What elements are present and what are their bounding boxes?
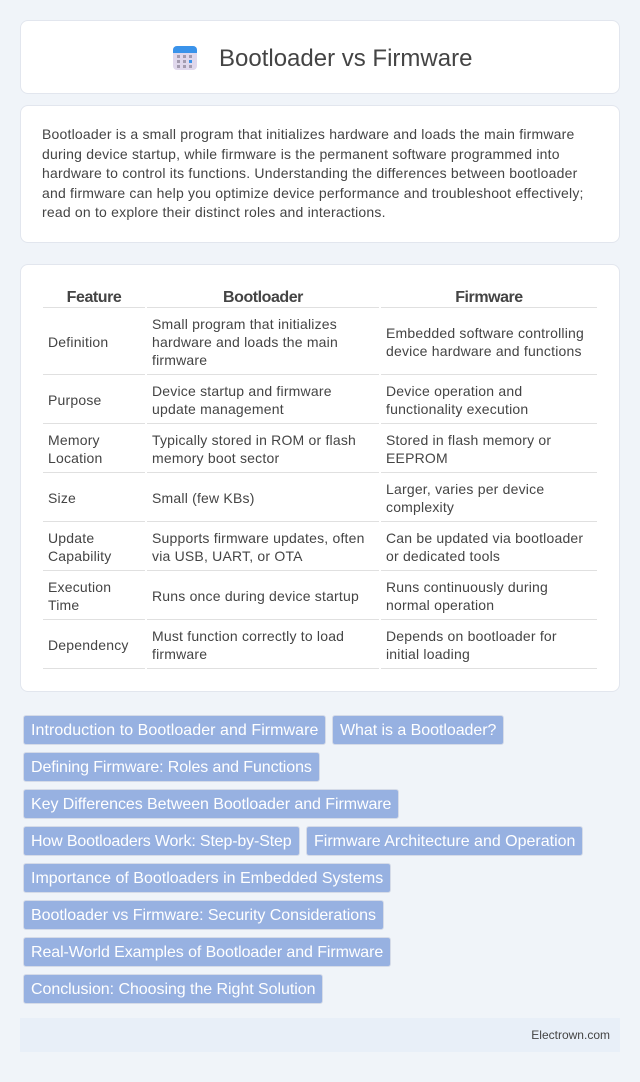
row: Execution Time: Execution <box>48 579 111 595</box>
table header: Bootloader <box>223 289 303 306</box>
chip: introduction <box>23 715 326 745</box>
row: Definition: hardware and loads the main <box>152 334 338 350</box>
row: Size: complexity <box>386 499 454 515</box>
chip: key differences: Key Differences Between Bootloader and Firmware <box>31 796 391 813</box>
row: Update Capability <box>48 530 583 564</box>
row: Purpose: Purpose <box>48 392 102 408</box>
row: Size <box>48 481 544 515</box>
footer <box>20 1018 620 1052</box>
chip: key differences <box>23 789 399 819</box>
row: Dependency <box>48 628 557 662</box>
chip: importance <box>23 863 391 893</box>
chip: defining firmware <box>23 752 320 782</box>
icon: calendar grid <box>173 46 197 70</box>
table header <box>67 289 523 306</box>
row: Memory Location: Memory <box>48 432 100 448</box>
row: Update Capability: Supports firmware updates, often <box>152 530 365 546</box>
row: Definition <box>48 316 584 368</box>
panel: title <box>20 20 620 94</box>
intro text: hardware to control its functions. Understanding the differences between bootloader <box>42 165 577 181</box>
row: Size: Larger, varies per device <box>386 481 544 497</box>
chip: real-world examples: Real-World Examples of Bootloader and Firmware <box>31 944 383 961</box>
row: Purpose <box>48 383 528 417</box>
row: Update Capability: or dedicated tools <box>386 548 500 564</box>
intro text: Bootloader is a small program that initializes hardware and loads the main firmware <box>42 126 575 142</box>
row: Execution Time: Runs continuously during <box>386 579 548 595</box>
table header: Feature <box>67 289 121 306</box>
chip: conclusion <box>23 974 323 1004</box>
row: Size: Size <box>48 490 76 506</box>
chip: real-world examples <box>23 937 391 967</box>
topic chips <box>23 715 583 1004</box>
row: Execution Time: normal operation <box>386 597 494 613</box>
title text: Bootloader vs Firmware <box>219 45 472 72</box>
chip: what is a bootloader <box>332 715 504 745</box>
row: Memory Location: Stored in flash memory or <box>386 432 551 448</box>
row: Definition: Definition <box>48 334 108 350</box>
row: Execution Time: Time <box>48 597 79 613</box>
row: Execution Time: Runs once during device startup <box>152 588 359 604</box>
row: Update Capability: Capability <box>48 548 111 564</box>
intro text: read on to explore their distinct roles and interactions. <box>42 204 386 220</box>
row: Dependency: firmware <box>152 646 207 662</box>
row: Memory Location <box>48 432 551 466</box>
chip: security <box>23 900 384 930</box>
row: Update Capability: Can be updated via bootloader <box>386 530 583 546</box>
row: Dependency: Depends on bootloader for <box>386 628 557 644</box>
panel: intro paragraph <box>20 105 620 243</box>
chip: security: Bootloader vs Firmware: Security Considerations <box>31 907 376 924</box>
row: Memory Location: memory boot sector <box>152 450 279 466</box>
row: Update Capability: via USB, UART, or OTA <box>152 548 303 564</box>
chip: firmware architecture: Firmware Architecture and Operation <box>314 833 575 850</box>
chip: defining firmware: Defining Firmware: Roles and Functions <box>31 759 312 776</box>
chip: firmware architecture <box>306 826 583 856</box>
row: Size: Small (few KBs) <box>152 490 255 506</box>
chip: how bootloaders work <box>23 826 300 856</box>
row: Purpose: functionality execution <box>386 401 528 417</box>
row: Dependency: initial loading <box>386 646 470 662</box>
row: Update Capability: Update <box>48 530 94 546</box>
intro text: during device startup, while firmware is the permanent software programmed into <box>42 146 560 162</box>
intro text <box>42 126 584 220</box>
row: Definition: firmware <box>152 352 207 368</box>
row: Memory Location: Location <box>48 450 103 466</box>
row: Definition: device hardware and functions <box>386 343 582 359</box>
row: Dependency: Must function correctly to load <box>152 628 344 644</box>
row: Definition: Small program that initializes <box>152 316 337 332</box>
row: Memory Location: EEPROM <box>386 450 448 466</box>
row: Definition: Embedded software controlling <box>386 325 584 341</box>
row: Purpose: update management <box>152 401 284 417</box>
table header: Firmware <box>455 289 523 306</box>
chip: what is a bootloader: What is a Bootloader? <box>340 722 496 739</box>
panel: comparison table <box>20 264 620 692</box>
row: Purpose: Device startup and firmware <box>152 383 332 399</box>
chip: importance: Importance of Bootloaders in Embedded Systems <box>31 870 383 887</box>
row: Memory Location: Typically stored in ROM or flash <box>152 432 356 448</box>
row: Purpose: Device operation and <box>386 383 522 399</box>
footer credit: Electrown.com <box>531 1028 610 1042</box>
row: Dependency: Dependency <box>48 637 129 653</box>
chip: introduction: Introduction to Bootloader and Firmware <box>31 722 318 739</box>
row: Execution Time <box>48 579 548 613</box>
intro text: and firmware can help you optimize device performance and troubleshoot effectively; <box>42 185 584 201</box>
chip: conclusion: Conclusion: Choosing the Right Solution <box>31 981 315 998</box>
chip: how bootloaders work: How Bootloaders Work: Step-by-Step <box>31 833 292 850</box>
